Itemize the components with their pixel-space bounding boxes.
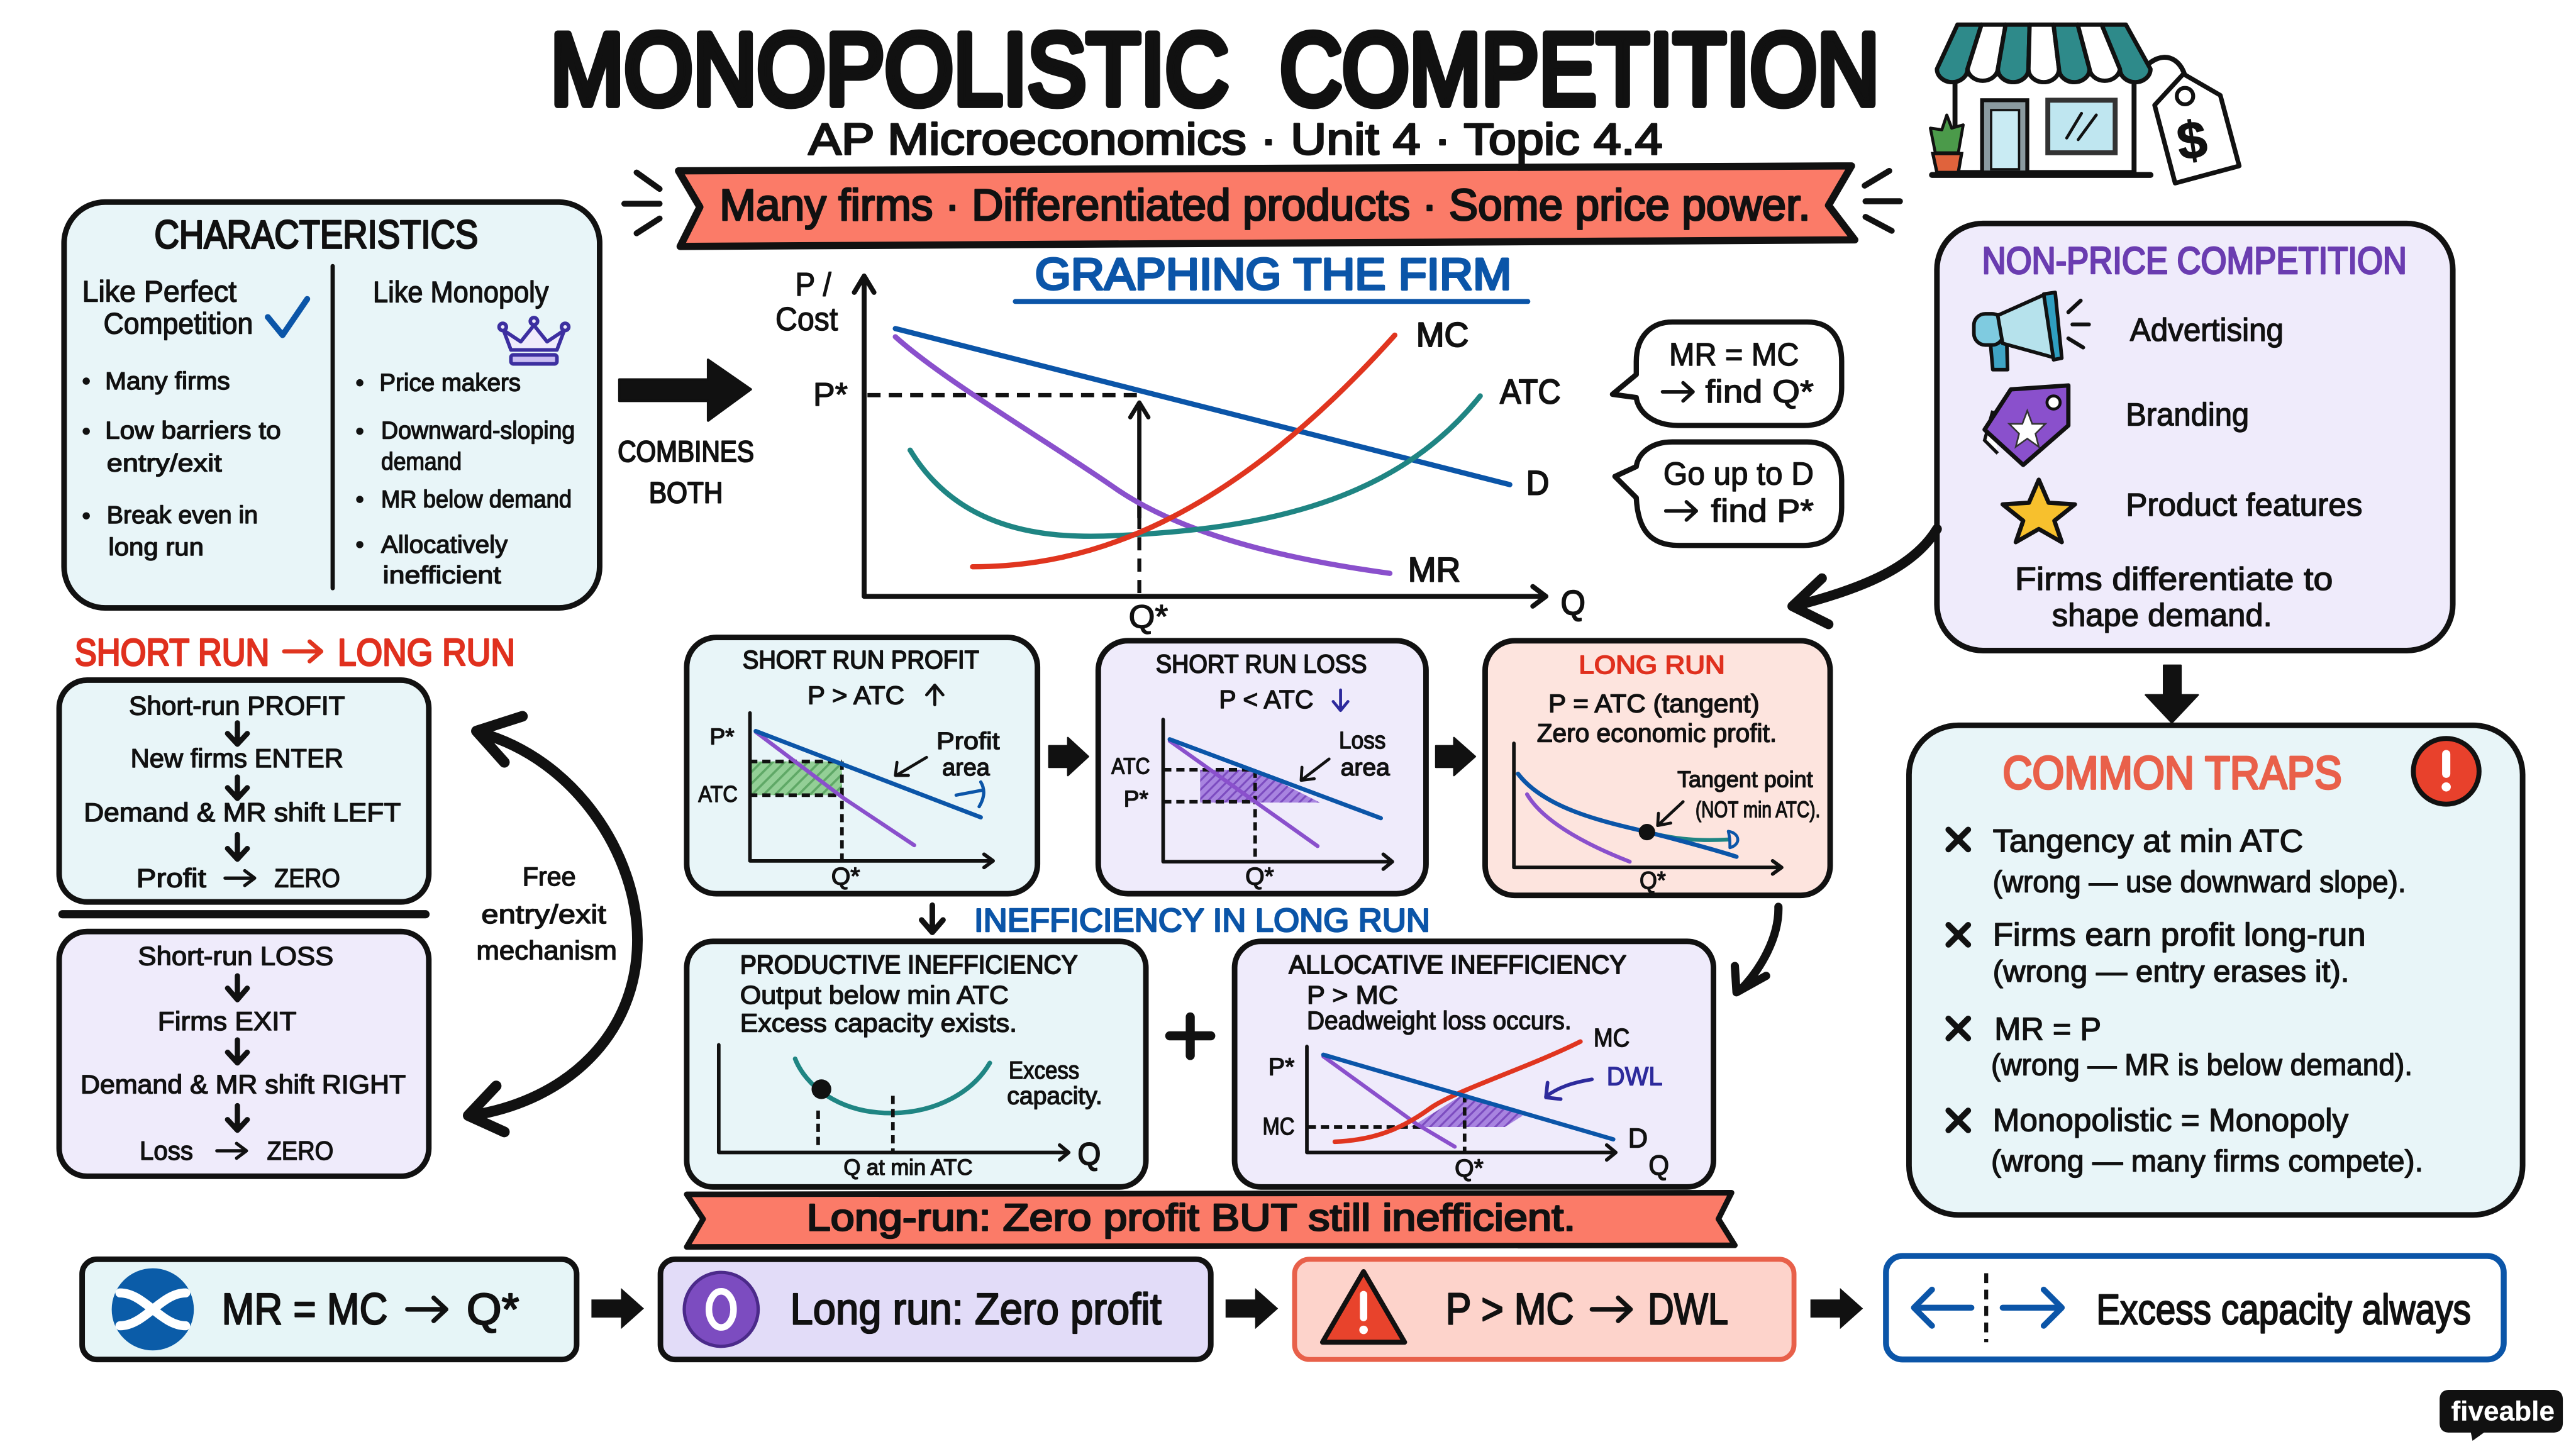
mini chart: profit area: Q* (831, 863, 860, 891)
mini chart: profit area: area (942, 755, 991, 781)
curve: demand (896, 328, 1510, 485)
arrow: summary 3 to 4 (1811, 1288, 1863, 1329)
callout: go up to demand: Go up to D (1663, 456, 1814, 492)
trap items: (wrong — many firms compete). (1991, 1145, 2423, 1179)
arrow: loss to long run (1436, 738, 1475, 775)
panel: short-run loss flow (59, 931, 429, 1176)
panel: allocative inefficiency: ALLOCATIVE INEFFICIENCY (1289, 950, 1626, 979)
trap items: Monopolistic = Monopoly (1993, 1102, 2349, 1138)
arrow: summary 1 to 2 (591, 1288, 644, 1329)
icon: left and right arrows (1914, 1273, 2062, 1342)
panel: characteristics (64, 202, 599, 608)
main banner (679, 166, 1855, 247)
mini chart: deadweight loss: Q* (1455, 1155, 1484, 1182)
mini chart: tangency: (NOT min ATC). (1696, 797, 1820, 823)
label: free entry/exit mechanism: entry/exit (481, 899, 606, 929)
chart: firm cost and revenue graph: Q* (1129, 599, 1168, 635)
trap items: (wrong — MR is below demand). (1991, 1048, 2412, 1082)
mini chart: loss area: ATC (1111, 753, 1150, 779)
trap items: Tangency at min ATC (1993, 823, 2303, 858)
heading: non-price competition: NON-PRICE COMPETITION (1982, 240, 2407, 282)
summary: MR equals MC (82, 1259, 577, 1360)
panel: allocative inefficiency: P > MC (1307, 980, 1398, 1009)
icon: storefront with price tag: $ (2174, 109, 2211, 172)
chart: firm cost and revenue graph: ATC (1500, 372, 1561, 411)
panel: short-run loss flow: Demand & MR shift RIGHT (80, 1069, 406, 1099)
panel: short run loss: P < ATC (1219, 685, 1313, 714)
chart: firm cost and revenue graph: P* (813, 377, 848, 413)
column: like monopoly: MR below demand (381, 486, 572, 513)
icon: gold star (2002, 480, 2075, 542)
heading: short run to long run (75, 631, 515, 674)
column: like monopoly: Like Monopoly (373, 275, 549, 309)
chart: firm cost and revenue graph: MR (1408, 550, 1460, 589)
mini chart: loss area: P* (1124, 786, 1148, 812)
column: like perfect competition: long run (108, 534, 204, 561)
panel: non-price competition: Product features (2126, 487, 2362, 523)
heading: common traps: COMMON TRAPS (2002, 748, 2342, 799)
callout: MR equals MC (1613, 322, 1841, 426)
mini chart: deadweight loss: DWL (1607, 1061, 1663, 1091)
panel: non-price competition: Advertising (2130, 312, 2284, 348)
chart: firm cost and revenue graph: Q (1561, 583, 1585, 622)
mini chart: excess capacity: Excess (1009, 1057, 1079, 1084)
summary: long run zero profit (660, 1259, 1211, 1360)
mini chart: loss area (1111, 719, 1392, 891)
heading: inefficiency in long run: INEFFICIENCY IN LONG RUN (974, 902, 1430, 939)
panel: short-run profit flow (59, 680, 429, 902)
mini chart: loss area: area (1341, 755, 1391, 781)
trap items: MR = P (1994, 1011, 2101, 1047)
panel: short run loss (1098, 641, 1426, 894)
arrow: characteristics to graph (619, 360, 751, 421)
panel: long run: P = ATC (tangent) (1548, 689, 1760, 718)
logo: fiveable: fiveable (2451, 1396, 2555, 1426)
panel: common traps (1909, 725, 2523, 1215)
heading: short run to long run: LONG RUN (338, 631, 515, 674)
curve: marginal cost (972, 335, 1395, 567)
icon: exclamation (2413, 738, 2479, 804)
mini chart: profit area: P* (709, 723, 735, 749)
banner burst right (1865, 171, 1900, 231)
icon: storefront with price tag (1930, 25, 2239, 183)
panel: short-run profit flow: New firms ENTER (131, 743, 343, 773)
title: MONOPOLISTIC (550, 13, 1229, 126)
panel: short-run loss flow: Loss (140, 1136, 193, 1165)
mini chart: profit area (698, 713, 1000, 891)
banner: long-run summary (687, 1192, 1735, 1247)
panel: non-price competition: shape demand. (2052, 597, 2272, 633)
column: like perfect competition: Many firms (105, 368, 230, 395)
summary: P greater than MC (1294, 1259, 1794, 1360)
column: like perfect competition: entry/exit (107, 450, 222, 477)
summary: P greater than MC: P > MC (1446, 1284, 1574, 1333)
mini chart: profit area: Profit (936, 728, 1000, 755)
column: like monopoly: demand (381, 448, 462, 475)
summary: excess capacity always (1886, 1256, 2504, 1360)
trap items: Firms earn profit long-run (1993, 916, 2366, 952)
column: like perfect competition: Competition (104, 306, 253, 340)
label: combines both: COMBINES (618, 435, 754, 468)
label: free entry/exit mechanism: Free (523, 862, 576, 891)
chart: firm cost and revenue graph: D (1526, 463, 1549, 502)
mini chart: loss area: Q* (1245, 863, 1274, 891)
panel: productive inefficiency: PRODUCTIVE INEFFICIENCY (740, 950, 1078, 979)
arrow: non-price to common traps (2146, 665, 2198, 723)
mini chart: deadweight loss: MC (1263, 1113, 1294, 1140)
column: like perfect competition: Like Perfect (82, 274, 236, 308)
panel: short run profit (687, 638, 1038, 894)
panel: non-price competition: Branding (2126, 397, 2249, 433)
column: like perfect competition (82, 274, 307, 561)
label: free entry/exit mechanism: mechanism (477, 936, 617, 965)
trap items: (wrong — entry erases it). (1993, 955, 2350, 989)
main banner: Many firms · Differentiated products · Some price power. (719, 180, 1811, 230)
subtitle: AP Microeconomics · Unit 4 · Topic 4.4 (808, 114, 1663, 164)
panel: allocative inefficiency: Deadweight loss occurs. (1307, 1006, 1572, 1035)
callout: MR equals MC: find Q* (1706, 374, 1814, 409)
mini chart: deadweight loss: D (1628, 1124, 1648, 1154)
panel: short run profit: SHORT RUN PROFIT (743, 645, 979, 674)
column: like perfect competition: Low barriers to (105, 417, 281, 444)
panel: productive inefficiency: Excess capacity exists. (740, 1008, 1017, 1037)
icon: crown (499, 318, 569, 364)
callout: go up to demand (1615, 442, 1841, 545)
logo: fiveable (2440, 1390, 2563, 1441)
column: like monopoly: Allocatively (381, 531, 508, 558)
panel: short run loss: SHORT RUN LOSS (1156, 650, 1367, 679)
heading: characteristics: CHARACTERISTICS (155, 213, 478, 257)
title: COMPETITION (1280, 13, 1879, 126)
column: like monopoly: Downward-sloping (381, 417, 575, 444)
summary: P greater than MC: DWL (1648, 1284, 1728, 1333)
panel: long run (1485, 641, 1830, 896)
panel: productive inefficiency (687, 941, 1146, 1187)
icon: warning triangle (1323, 1272, 1404, 1342)
panel: long run: LONG RUN (1579, 650, 1725, 679)
title (550, 13, 1879, 126)
panel: short run profit: P > ATC (808, 680, 904, 709)
mini chart: deadweight loss: P* (1269, 1054, 1294, 1081)
mini chart: profit area: ATC (698, 781, 738, 807)
mini chart: loss area: Loss (1339, 728, 1385, 754)
mini chart: deadweight loss (1263, 1023, 1669, 1182)
label: free entry/exit mechanism (477, 862, 617, 965)
panel: short-run profit flow: Demand & MR shift LEFT (84, 797, 401, 827)
arrow: non-price to graph (1792, 529, 1937, 625)
mini chart: excess capacity: Q at min ATC (843, 1155, 972, 1180)
column: like perfect competition: Break even in (107, 502, 258, 529)
arrow: to inefficiency (921, 905, 943, 932)
column: like monopoly (356, 275, 575, 589)
arrow: long run to allocative (1735, 907, 1779, 992)
panel: short-run profit flow: Short-run PROFIT (129, 691, 345, 720)
arrow: profit to loss (1049, 738, 1089, 775)
panel: short-run profit flow: ZERO (274, 863, 340, 893)
summary: excess capacity always: Excess capacity always (2096, 1286, 2471, 1333)
curve: average total cost (910, 396, 1480, 536)
panel: non-price competition: Firms differentiate to (2015, 561, 2333, 597)
panel: non-price competition (1937, 223, 2453, 650)
chart: firm cost and revenue graph: Cost (775, 301, 838, 338)
summary: MR equals MC: MR = MC (222, 1284, 387, 1333)
panel: allocative inefficiency (1235, 941, 1714, 1187)
panel: short-run loss flow: Firms EXIT (158, 1006, 297, 1036)
callout: MR equals MC: MR = MC (1669, 336, 1799, 372)
label: combines both (618, 435, 754, 509)
summary: long run zero profit: Long run: Zero profit (790, 1284, 1162, 1333)
chart: firm cost and revenue graph: P / (795, 267, 831, 303)
mini chart: excess capacity: capacity. (1007, 1082, 1102, 1109)
column: like monopoly: Price makers (379, 370, 521, 397)
label: combines both: BOTH (649, 475, 723, 509)
arrow: summary 2 to 3 (1226, 1288, 1278, 1329)
panel: short-run loss flow: ZERO (267, 1136, 333, 1165)
chart: firm cost and revenue graph: MC (1416, 315, 1468, 354)
column: like monopoly: inefficient (383, 562, 501, 589)
banner burst left (625, 172, 660, 233)
curve: marginal revenue (896, 337, 1390, 574)
heading: short run to long run: SHORT RUN (75, 631, 269, 674)
banner: long-run summary: Long-run: Zero profit BUT still inefficient. (807, 1197, 1575, 1239)
chart: firm cost and revenue graph (775, 267, 1585, 635)
panel: short-run profit flow: Profit (136, 863, 206, 893)
icon: crossing arrows (112, 1269, 194, 1350)
mini chart: excess capacity: Q (1078, 1136, 1101, 1172)
summary: MR equals MC: Q* (467, 1284, 519, 1333)
icon: megaphone (1974, 292, 2089, 370)
mini chart: tangency: Q* (1640, 867, 1666, 894)
mini chart: deadweight loss: MC (1594, 1023, 1629, 1052)
arrow: free entry and exit loop (468, 716, 638, 1132)
panel: long run: Zero economic profit. (1537, 718, 1777, 747)
icon: plus (1170, 1017, 1211, 1055)
mini chart: tangency: Tangent point (1677, 766, 1813, 792)
icon: zero (684, 1272, 758, 1346)
panel: productive inefficiency: Output below min ATC (740, 980, 1009, 1009)
icon: brand tag (1985, 386, 2068, 465)
callout: go up to demand: find P* (1711, 492, 1814, 528)
trap items (1948, 823, 2423, 1179)
mini chart: deadweight loss: Q (1648, 1150, 1669, 1181)
mini chart: excess capacity (719, 1045, 1102, 1180)
mini chart: tangency (1514, 743, 1820, 894)
panel: short-run loss flow: Short-run LOSS (138, 941, 333, 971)
heading: graphing the firm: GRAPHING THE FIRM (1035, 249, 1511, 299)
trap items: (wrong — use downward slope). (1993, 865, 2406, 899)
